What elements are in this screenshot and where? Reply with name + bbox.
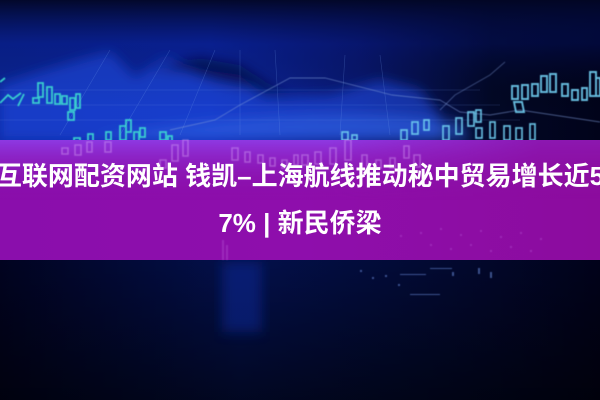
candlesticks: right blue group — [512, 72, 600, 112]
blue mountain glow — [0, 52, 470, 140]
candlesticks showing through band — [62, 140, 420, 169]
dotted texture on band — [222, 228, 542, 260]
purple title band — [0, 140, 600, 260]
title line 2: 7% | 新民侨梁 — [218, 208, 382, 238]
thin trend line — [170, 78, 600, 130]
chart grid lines — [0, 50, 520, 135]
title line 1: 互联网配资网站 钱凯–上海航线推动秘中贸易增长近5 — [0, 161, 600, 191]
dots under band — [360, 268, 492, 295]
candlesticks: centre blue group — [342, 110, 535, 140]
title — [0, 161, 600, 238]
candlesticks: left teal group — [0, 78, 172, 146]
faint glow under band — [222, 262, 262, 332]
